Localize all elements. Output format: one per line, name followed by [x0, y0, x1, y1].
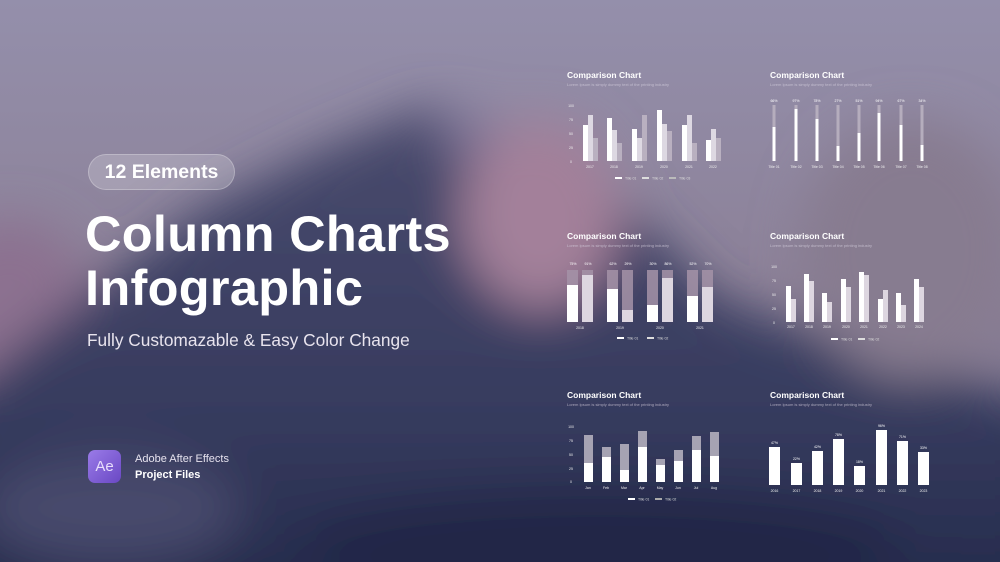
panel: chart 2 progress columns: Title 07	[895, 165, 907, 169]
panel: chart 6 single columns: 71%	[899, 435, 906, 439]
panel: chart 4 paired columns: 2024	[915, 325, 923, 329]
panel: chart 3 paired progress: Title 01	[627, 336, 638, 340]
panel: chart 3 paired progress: 52%	[689, 262, 697, 266]
panel: chart 2 progress columns: 67%	[897, 99, 905, 103]
panel: chart 2 progress columns: Title 04	[832, 165, 844, 169]
panel: chart 2 progress columns: Title 02	[790, 165, 802, 169]
panel: chart 4 paired columns: 2017	[787, 325, 795, 329]
panel: chart 3 paired progress: 91%	[584, 262, 592, 266]
panel: chart 6 single columns: 96%	[878, 424, 885, 428]
panel: chart 4 paired columns: 2022	[879, 325, 887, 329]
panel: chart 6 single columns: 2018	[814, 489, 821, 493]
panel: chart 4 paired columns: 0	[773, 321, 775, 325]
panel: chart 3 paired progress: Comparison Chart	[567, 231, 641, 241]
panel: chart 1 grouped bars: 2019	[635, 165, 643, 169]
panel: chart 2 progress columns: 27%	[834, 99, 842, 103]
panel: chart 6 single columns: 2021	[878, 489, 885, 493]
panel: chart 3 paired progress: 29%	[624, 262, 632, 266]
panel: chart 4 paired columns: 75	[772, 279, 776, 283]
panel: chart 4 paired columns: 100	[771, 265, 777, 269]
panel: chart 2 progress columns: Title 03	[811, 165, 823, 169]
panel: chart 1 grouped bars	[567, 70, 721, 180]
panel: chart 6 single columns: Comparison Chart	[770, 390, 844, 400]
panel: chart 2 progress columns	[768, 70, 928, 169]
panel: chart 3 paired progress: 62%	[609, 262, 617, 266]
panel: chart 3 paired progress: 86%	[664, 262, 672, 266]
panel: chart 4 paired columns: Lorem Ipsum is simply dummy text of the printing industry	[770, 243, 872, 248]
panel: chart 2 progress columns: 34%	[918, 99, 926, 103]
project info text	[135, 453, 229, 481]
panel: chart 5 stacked columns: 25	[569, 467, 573, 471]
panel: chart 3 paired progress: 2019	[616, 326, 624, 330]
panel: chart 4 paired columns: Title 01	[841, 338, 852, 342]
panel: chart 5 stacked columns: 100	[568, 425, 574, 429]
panel: chart 4 paired columns: Comparison Chart	[770, 231, 844, 241]
subtitle: Fully Customazable & Easy Color Change	[87, 330, 410, 350]
panel: chart 1 grouped bars: 2018	[610, 165, 618, 169]
panel: chart 6 single columns: 22%	[793, 457, 800, 461]
panel: chart 5 stacked columns: Comparison Chart	[567, 390, 641, 400]
panel: chart 4 paired columns: 2019	[823, 325, 831, 329]
panel: chart 1 grouped bars: 75	[569, 118, 573, 122]
panel: chart 5 stacked columns	[567, 390, 719, 502]
panel: chart 1 grouped bars: 50	[569, 132, 573, 136]
panel: chart 2 progress columns: 97%	[792, 99, 800, 103]
panel: chart 1 grouped bars: Lorem Ipsum is simply dummy text of the printing industry	[567, 82, 669, 87]
panel: chart 2 progress columns: Title 06	[873, 165, 885, 169]
panel: chart 1 grouped bars: 2022	[709, 165, 717, 169]
icon: Ae: Ae	[95, 458, 114, 475]
badge: 12 Elements: 12 Elements	[105, 161, 218, 183]
panel: chart 1 grouped bars: Comparison Chart	[567, 70, 641, 80]
panel: chart 5 stacked columns: Feb	[603, 486, 609, 490]
project info text: Project Files	[135, 469, 200, 481]
panel: chart 2 progress columns: Lorem Ipsum is simply dummy text of the printing industry	[770, 82, 872, 87]
panel: chart 4 paired columns: 50	[772, 293, 776, 297]
panel: chart 3 paired progress: 2020	[656, 326, 664, 330]
panel: chart 3 paired progress	[567, 231, 713, 340]
panel: chart 3 paired progress: 70%	[704, 262, 712, 266]
panel: chart 2 progress columns: Title 05	[853, 165, 865, 169]
panel: chart 6 single columns: 42%	[814, 445, 821, 449]
panel: chart 6 single columns: Lorem Ipsum is simply dummy text of the printing industry	[770, 402, 872, 407]
panel: chart 6 single columns: 47%	[771, 441, 778, 445]
panel: chart 6 single columns: 2022	[899, 489, 906, 493]
panel: chart 4 paired columns: 25	[772, 307, 776, 311]
project info text: Adobe After Effects	[135, 453, 229, 465]
panel: chart 2 progress columns: 66%	[770, 99, 778, 103]
panel: chart 2 progress columns: 94%	[875, 99, 883, 103]
panel: chart 6 single columns: 2016	[771, 489, 778, 493]
panel: chart 5 stacked columns: Jul	[694, 486, 698, 490]
panel: chart 5 stacked columns: Jan	[585, 486, 591, 490]
panel: chart 4 paired columns: 2023	[897, 325, 905, 329]
panel: chart 3 paired progress: Title 02	[657, 336, 668, 340]
main title	[85, 205, 451, 316]
badge: 12 Elements	[88, 154, 235, 190]
panel: chart 4 paired columns: 2020	[842, 325, 850, 329]
panel: chart 2 progress columns: Title 08	[916, 165, 928, 169]
panel: chart 5 stacked columns: 0	[570, 480, 572, 484]
panel: chart 5 stacked columns: May	[657, 486, 664, 490]
panel: chart 3 paired progress: 75%	[569, 262, 577, 266]
panel: chart 1 grouped bars: 2020	[660, 165, 668, 169]
panel: chart 4 paired columns: 2018	[805, 325, 813, 329]
panel: chart 6 single columns	[769, 390, 929, 493]
panel: chart 1 grouped bars: 2017	[586, 165, 594, 169]
panel: chart 1 grouped bars: Title 01	[625, 176, 636, 180]
panel: chart 1 grouped bars: 2021	[685, 165, 693, 169]
panel: chart 3 paired progress: 2021	[696, 326, 704, 330]
panel: chart 4 paired columns: 2021	[860, 325, 868, 329]
panel: chart 1 grouped bars: 25	[569, 146, 573, 150]
panel: chart 1 grouped bars: Title 02	[652, 176, 663, 180]
panel: chart 2 progress columns: 78%	[813, 99, 821, 103]
panel: chart 5 stacked columns: Title 01	[638, 498, 649, 502]
panel: chart 5 stacked columns: Apr	[639, 486, 646, 490]
panel: chart 5 stacked columns: Aug	[711, 486, 717, 490]
panel: chart 6 single columns: 2023	[920, 489, 927, 493]
panel: chart 6 single columns: 2020	[856, 489, 863, 493]
panel: chart 5 stacked columns: 75	[569, 439, 573, 443]
panel: chart 5 stacked columns: Title 02	[665, 498, 676, 502]
panel: chart 4 paired columns	[770, 231, 924, 342]
panel: chart 6 single columns: 2017	[793, 489, 800, 493]
main title: Infographic	[85, 259, 363, 316]
panel: chart 1 grouped bars: Title 03	[679, 176, 690, 180]
panel: chart 3 paired progress: Lorem Ipsum is simply dummy text of the printing industry	[567, 243, 669, 248]
panel: chart 5 stacked columns: Mar	[621, 486, 628, 490]
panel: chart 3 paired progress: 30%	[649, 262, 657, 266]
panel: chart 1 grouped bars: 100	[568, 104, 574, 108]
panel: chart 4 paired columns: Title 02	[868, 338, 879, 342]
panel: chart 6 single columns: 78%	[835, 433, 842, 437]
panel: chart 5 stacked columns: Jun	[675, 486, 681, 490]
panel: chart 2 progress columns: Title 01	[768, 165, 780, 169]
panel: chart 3 paired progress: 2018	[576, 326, 584, 330]
panel: chart 6 single columns: 18%	[856, 460, 863, 464]
panel: chart 6 single columns: 33%	[920, 446, 927, 450]
panel: chart 5 stacked columns: 50	[569, 453, 573, 457]
panel: chart 2 progress columns: Comparison Chart	[770, 70, 844, 80]
panel: chart 5 stacked columns: Lorem Ipsum is simply dummy text of the printing industry	[567, 402, 669, 407]
main title: Column Charts	[85, 205, 451, 262]
panel: chart 2 progress columns: 51%	[855, 99, 863, 103]
panel: chart 6 single columns: 2019	[835, 489, 842, 493]
panel: chart 1 grouped bars: 0	[570, 160, 572, 164]
icon: Ae	[88, 450, 121, 483]
